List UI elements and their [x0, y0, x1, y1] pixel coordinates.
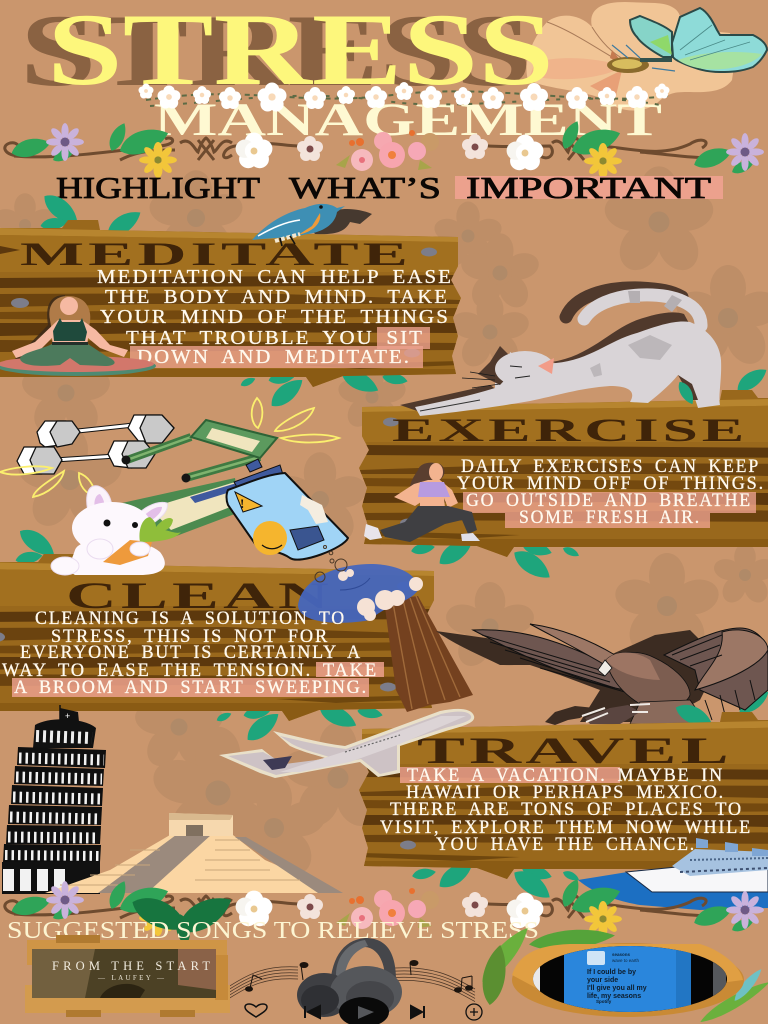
panel: exercise sign	[359, 390, 768, 558]
text block: meditate	[97, 267, 453, 368]
heading: exercise: EXERCISE	[392, 413, 748, 449]
album card: from the start: — LAUFEY —	[97, 974, 165, 982]
illustration: water bottle	[190, 459, 348, 560]
illustration: leaning tower: +	[65, 711, 70, 721]
text block: exercise	[457, 457, 765, 528]
yellow leaf doodles	[0, 398, 339, 497]
dark green leaves	[127, 888, 237, 947]
heading: clean: CLEAN	[66, 576, 333, 617]
player controls	[245, 997, 482, 1024]
icon: heart	[245, 1004, 267, 1017]
leaves on eagle	[673, 699, 716, 732]
heading: travel: TRAVEL	[417, 731, 733, 772]
phone mirror: spotify lyric card	[512, 940, 744, 1020]
illustration: water bottle: !	[240, 496, 244, 511]
icon: play button	[339, 997, 389, 1024]
album card: from the start	[25, 935, 230, 1017]
subtitle: highlight what's important: HIGHLIGHT	[56, 170, 260, 205]
icon: add	[466, 1004, 482, 1020]
phone mirror: spotify lyric card: seasons	[612, 952, 631, 957]
illustration: watercolor flower	[526, 2, 735, 110]
subtitle: highlight what's important: IMPORTANT	[466, 170, 711, 205]
text block: exercise: DAILY EXERCISES CAN KEEP	[461, 457, 760, 477]
text block: meditate: DOWN AND MEDITATE.	[137, 347, 411, 368]
text block: meditate: THAT TROUBLE YOU SIT	[126, 328, 424, 349]
panel: meditate sign	[0, 220, 461, 388]
album card: from the start: FROM THE START	[52, 959, 210, 973]
illustration: tropical leaves	[475, 922, 768, 1024]
text block: meditate: MEDITATION CAN HELP EASE	[97, 267, 453, 288]
subtitle: highlight what's important	[56, 170, 723, 205]
text block: meditate: YOUR MIND OF THE THINGS	[100, 307, 450, 328]
illustration: eagle	[436, 624, 768, 725]
text block: meditate: THE BODY AND MIND. TAKE	[105, 287, 449, 308]
phone mirror: spotify lyric card: Spotify	[596, 999, 612, 1004]
illustration: airplane	[219, 709, 474, 778]
phone mirror: spotify lyric card: life, my seasons	[587, 993, 641, 1000]
illustration: dumbbells	[17, 415, 174, 474]
text block: exercise: SOME FRESH AIR.	[519, 508, 701, 528]
text block: clean: CLEANING IS A SOLUTION TO	[35, 609, 346, 629]
panel: travel sign	[359, 712, 768, 880]
title: MANAGEMENT: MANAGEMENT	[154, 94, 662, 146]
panel: clean sign	[0, 554, 473, 722]
illustration: leaning tower	[2, 705, 106, 894]
text block: clean	[2, 609, 384, 698]
leaves around signs	[15, 189, 768, 904]
phone mirror: spotify lyric card: wave to earth	[612, 958, 640, 963]
illustration: Mayan pyramid	[45, 813, 343, 893]
background flower pattern	[0, 166, 768, 881]
text block: exercise: GO OUTSIDE AND BREATHE	[466, 491, 752, 511]
heading: suggested songs: SUGGESTED SONGS TO RELIEVE STRESS	[7, 918, 539, 944]
illustration: headphones	[297, 938, 402, 1018]
phone mirror: spotify lyric card: your side	[587, 977, 618, 984]
text block: clean: EVERYONE BUT IS CERTAINLY A	[20, 643, 362, 663]
floral ornament divider: footer	[5, 876, 764, 937]
text block: exercise: YOUR MIND OFF OF THINGS.	[457, 474, 765, 494]
illustration: woman exercising	[364, 463, 480, 542]
subtitle: highlight what's important: WHAT’S	[289, 170, 441, 205]
illustration: treadmill	[122, 420, 277, 538]
phone mirror: spotify lyric card: If I could be by	[587, 969, 636, 976]
text block: travel: TAKE A VACATION. MAYBE IN	[407, 766, 724, 786]
text block: clean: STRESS, THIS IS NOT FOR	[51, 627, 329, 647]
illustration: bunny	[51, 486, 181, 575]
illustration: bubbles	[315, 546, 347, 582]
icon: next	[411, 1006, 424, 1018]
music notes	[246, 960, 472, 992]
text block: travel: THERE ARE TONS OF PLACES TO	[390, 800, 743, 820]
music staff left	[228, 967, 298, 999]
text block: travel: HAWAII OR PERHAPS MEXICO.	[406, 783, 725, 803]
phone mirror: spotify lyric card: I'll give you all my	[587, 985, 647, 992]
text block: travel	[380, 766, 752, 855]
text block: travel: YOU HAVE THE CHANCE.	[436, 835, 696, 855]
floral ornament divider	[5, 118, 764, 179]
music staff right	[394, 968, 475, 1002]
illustration: meditating woman	[0, 295, 156, 376]
text block: clean: WAY TO EASE THE TENSION. TAKE	[2, 661, 378, 681]
text block: travel: VISIT, EXPLORE THEM NOW WHILE	[380, 818, 752, 838]
illustration: cat	[400, 288, 721, 416]
text block: clean: A BROOM AND START SWEEPING.	[14, 678, 368, 698]
illustration: broom	[298, 564, 473, 712]
illustration: butterfly	[630, 8, 767, 72]
icon: previous	[305, 1006, 320, 1018]
heading: meditate: MEDITATE	[20, 237, 412, 273]
illustration: kingfisher bird	[252, 204, 372, 246]
illustration: cruise ship	[578, 838, 768, 910]
flower garland	[138, 82, 670, 112]
